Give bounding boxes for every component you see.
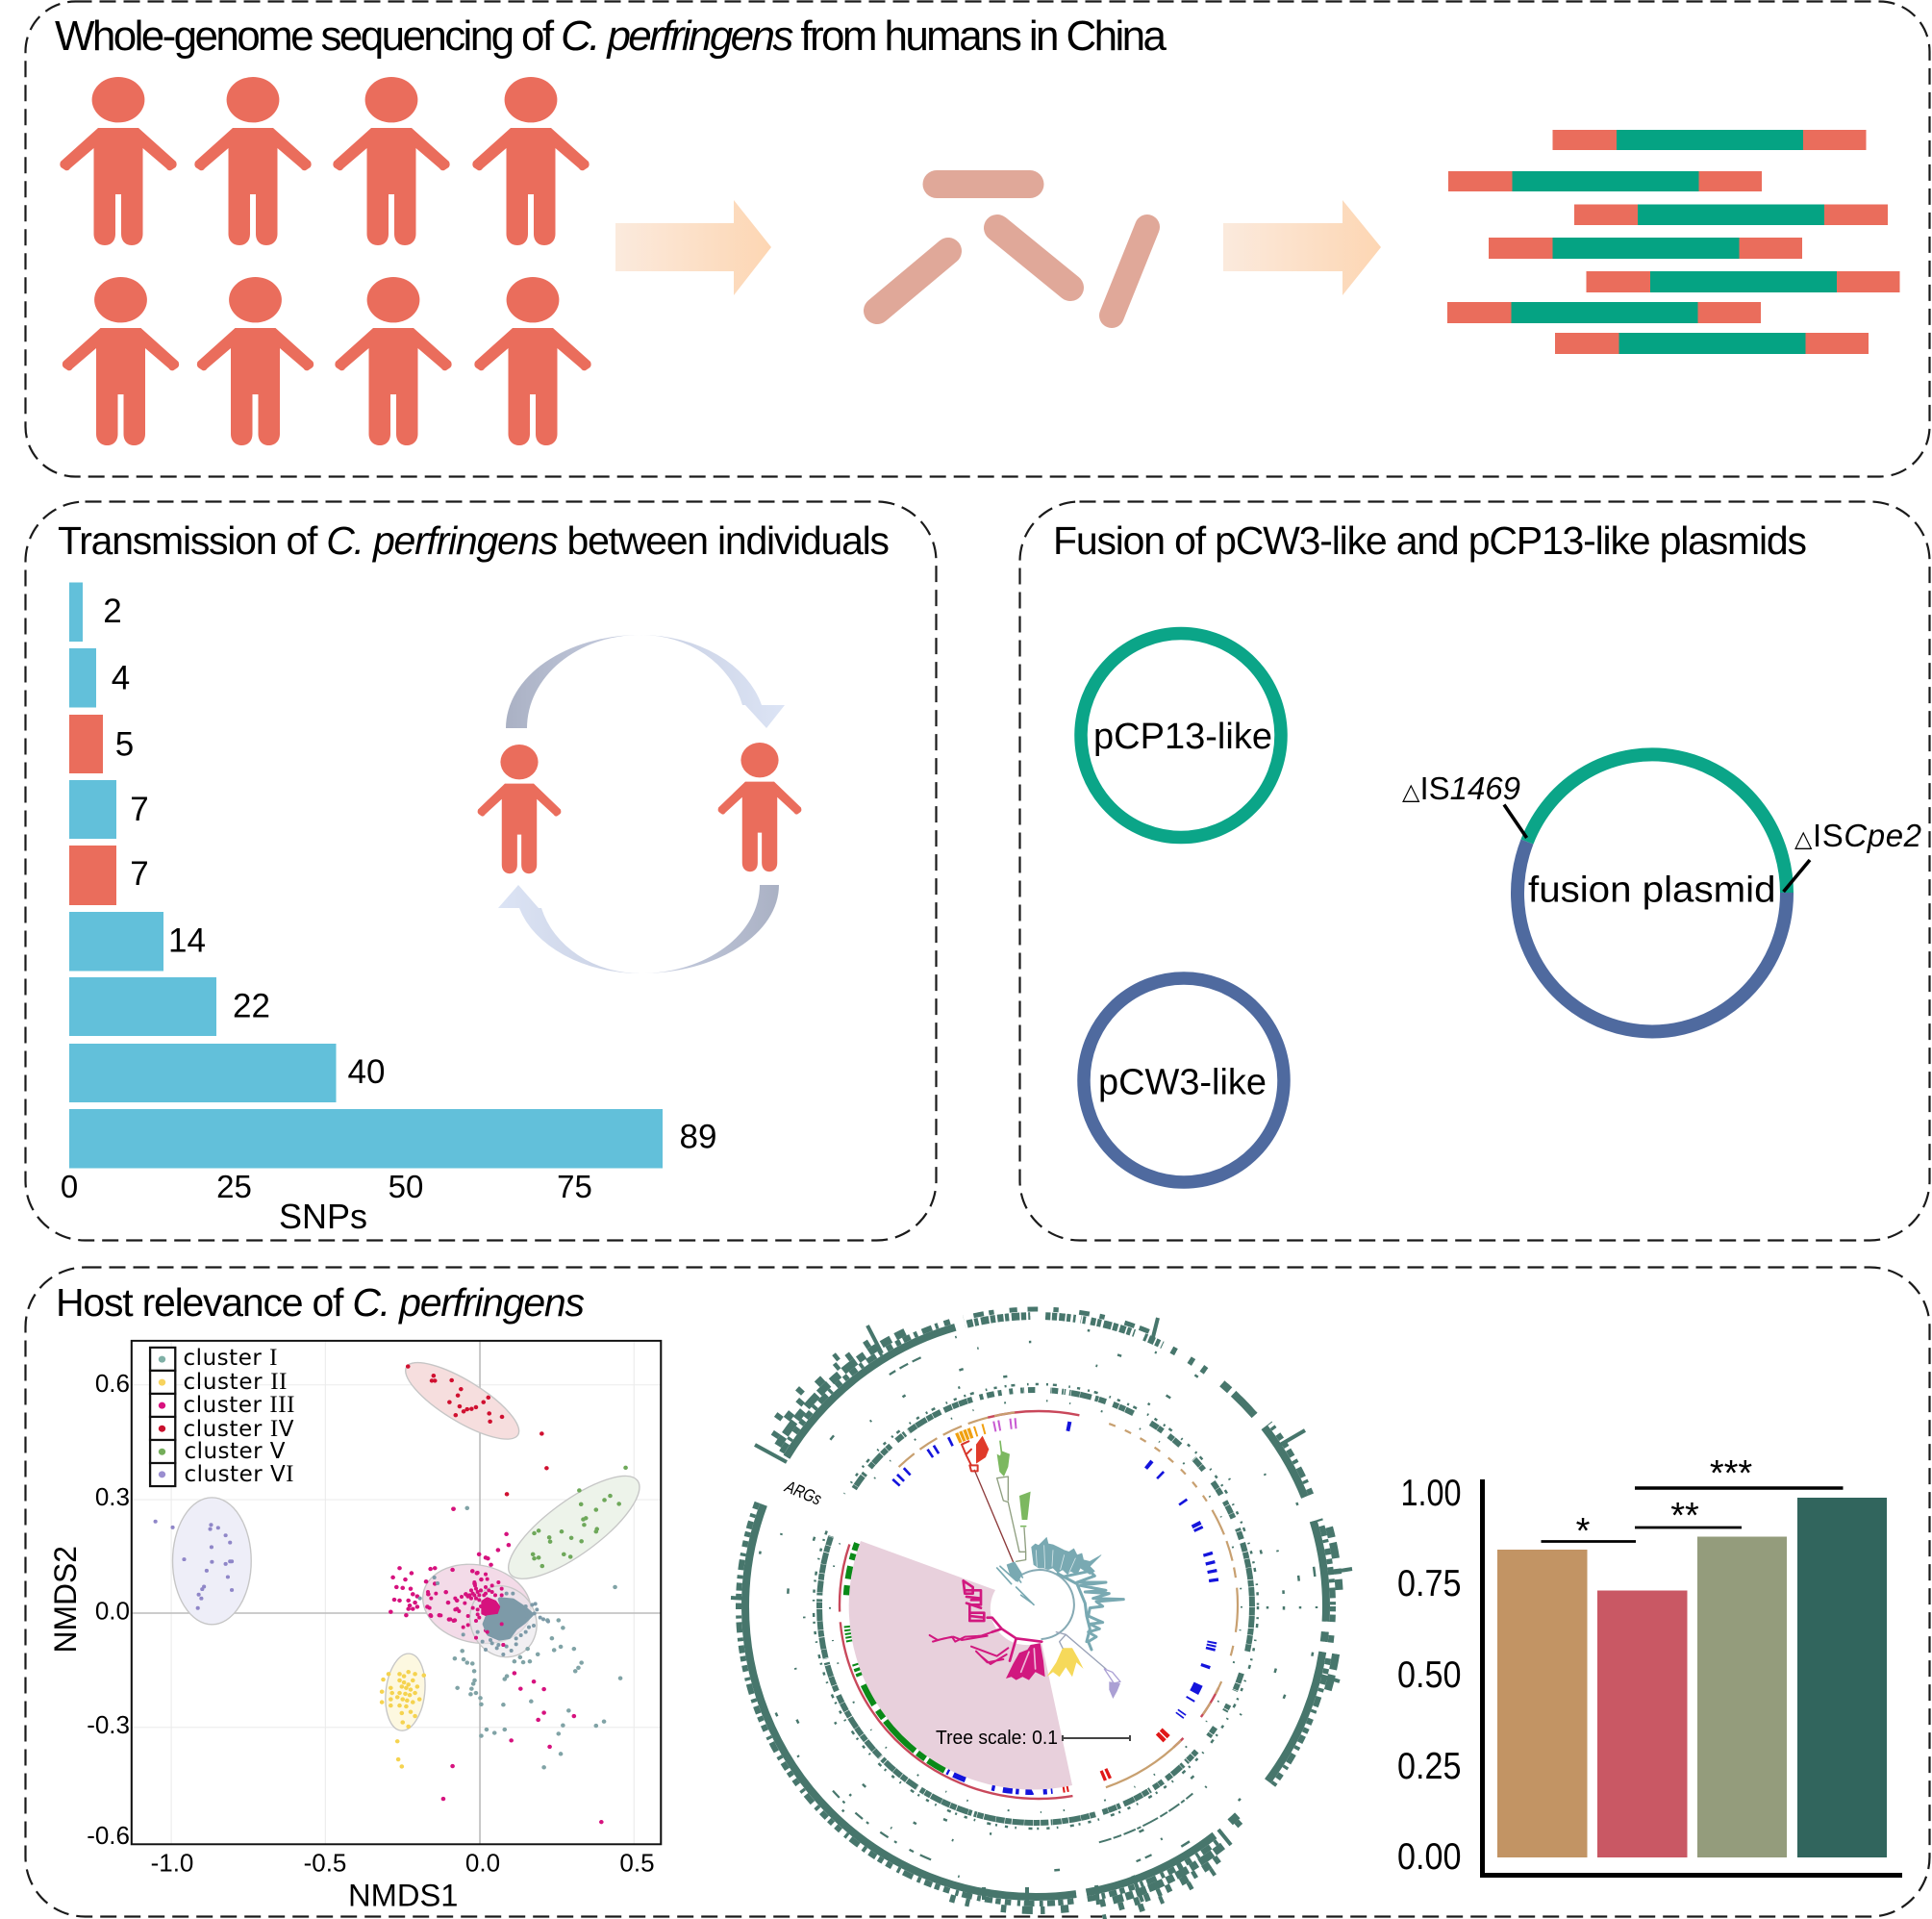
chart: NMDS scatter plot: cluster V bbox=[185, 1439, 286, 1464]
plasmid: pCP13-like bbox=[1081, 633, 1281, 837]
bar chart: SNPs: 22 bbox=[233, 987, 270, 1025]
chart: NMDS scatter plot bbox=[48, 1341, 661, 1912]
plasmid: pCP13-like: pCP13-like bbox=[1093, 717, 1272, 757]
heading: transmission: Transmission of C. perfringens between individuals bbox=[58, 518, 890, 563]
sequencing reads bbox=[1447, 130, 1900, 354]
plasmid: fusion plasmid: fusion plasmid bbox=[1528, 870, 1775, 910]
chart: NMDS scatter plot: 0.0 bbox=[95, 1597, 130, 1626]
chart: bar chart with significance brackets: ** bbox=[1670, 1496, 1699, 1536]
bar chart: SNPs: 25 bbox=[216, 1169, 252, 1204]
heading: host relevance: Host relevance of C. perfringens bbox=[56, 1280, 585, 1325]
long bar beside the gap bbox=[755, 1445, 787, 1462]
chart: NMDS scatter plot: 0.0 bbox=[465, 1849, 500, 1878]
chart: bar chart with significance brackets: * bbox=[1576, 1511, 1591, 1552]
plasmid: pCW3-like bbox=[1084, 978, 1284, 1182]
bar chart: SNPs bbox=[61, 583, 716, 1236]
panel: transmission between individuals bbox=[25, 502, 937, 1241]
icon: rod-shaped bacteria bbox=[877, 185, 1147, 316]
tree scale label: Tree scale: 0.1 bbox=[936, 1728, 1058, 1749]
resistance line ring bbox=[840, 1411, 1238, 1799]
chart: NMDS scatter plot: cluster VI bbox=[185, 1461, 294, 1487]
chart: NMDS scatter plot: NMDS2 bbox=[48, 1546, 83, 1653]
bar chart: SNPs: SNPs bbox=[279, 1197, 367, 1236]
plasmid: fusion plasmid bbox=[1402, 754, 1921, 1031]
chart: NMDS scatter plot: 0.6 bbox=[95, 1369, 130, 1398]
heading: plasmid fusion: Fusion of pCW3-like and pCP13-like plasmids bbox=[1053, 518, 1807, 563]
chart: NMDS scatter plot: cluster I bbox=[183, 1345, 277, 1371]
bar chart: SNPs: 5 bbox=[115, 725, 134, 764]
icon: transmission loop bbox=[478, 635, 801, 973]
chart: NMDS scatter plot: NMDS1 bbox=[348, 1878, 458, 1912]
arrow: bacteria to sequencing reads bbox=[1223, 200, 1381, 295]
chart: NMDS scatter plot: 0.3 bbox=[95, 1482, 130, 1511]
chart: bar chart with significance brackets: 0.25 bbox=[1397, 1746, 1462, 1787]
heading: whole-genome sequencing: Whole-genome sequencing of C. perfringens from humans in China bbox=[55, 13, 1167, 60]
chart: NMDS scatter plot: cluster II bbox=[183, 1369, 287, 1395]
chart: NMDS scatter plot: 0.5 bbox=[619, 1849, 655, 1878]
chart: NMDS scatter plot: -1.0 bbox=[151, 1849, 193, 1878]
bar chart: SNPs: 89 bbox=[680, 1118, 716, 1156]
plasmid: pCW3-like: pCW3-like bbox=[1098, 1062, 1267, 1102]
plasmid: fusion plasmid: △ISCpe2 bbox=[1794, 818, 1921, 853]
chart: NMDS scatter plot: -0.6 bbox=[87, 1821, 130, 1850]
chart: NMDS scatter plot: -0.5 bbox=[304, 1849, 346, 1878]
bar chart: SNPs: 50 bbox=[389, 1169, 423, 1204]
coloured tick ring bbox=[848, 1423, 1216, 1790]
chart: bar chart with significance brackets: *** bbox=[1710, 1453, 1752, 1494]
chart: circular phylogenetic tree with ARG rings bbox=[702, 1287, 1355, 1919]
outer bar ring bbox=[716, 1287, 1355, 1919]
ARGs label: ARGs bbox=[782, 1477, 824, 1509]
bar chart: SNPs: 2 bbox=[103, 593, 122, 630]
white gap in rings near ARGs label bbox=[702, 1426, 894, 1549]
panel: host relevance bbox=[25, 1268, 1929, 1919]
bar chart: SNPs: 7 bbox=[130, 791, 149, 828]
gaps between bar segments bbox=[726, 1297, 1345, 1916]
bar chart: SNPs: 0 bbox=[61, 1169, 78, 1204]
bar chart: SNPs: 4 bbox=[112, 660, 130, 696]
tree scale bar bbox=[1063, 1735, 1130, 1741]
panel: plasmid fusion bbox=[1019, 502, 1929, 1241]
icon group: eight human figures bbox=[60, 77, 591, 445]
phylogenetic tree bbox=[930, 1436, 1123, 1699]
chart: bar chart with significance brackets: 0.00 bbox=[1397, 1836, 1462, 1878]
chart: bar chart with significance brackets: 0.50 bbox=[1397, 1654, 1462, 1696]
bar chart: SNPs: 40 bbox=[348, 1053, 385, 1091]
chart: bar chart with significance brackets: 0.75 bbox=[1397, 1563, 1462, 1604]
bar chart: SNPs: 7 bbox=[130, 855, 149, 893]
chart: bar chart with significance brackets: 1.00 bbox=[1400, 1473, 1462, 1514]
sparse and inner rings bbox=[755, 1326, 1317, 1887]
bar chart: SNPs: 14 bbox=[168, 922, 206, 960]
bar chart: SNPs: 75 bbox=[557, 1169, 592, 1204]
chart: NMDS scatter plot: cluster III bbox=[183, 1392, 294, 1418]
panel: whole-genome sequencing bbox=[25, 2, 1929, 477]
plasmid: fusion plasmid: △IS1469 bbox=[1402, 770, 1520, 806]
long bars on outer ring bbox=[731, 1318, 1352, 1905]
chart: NMDS scatter plot: -0.3 bbox=[87, 1710, 130, 1739]
arrow: humans to bacteria bbox=[615, 200, 771, 295]
chart: NMDS scatter plot: cluster IV bbox=[183, 1416, 294, 1442]
dense core of clusters I and III bbox=[420, 1573, 548, 1654]
pink sector bbox=[849, 1541, 1072, 1790]
low-bar stretch along the top bbox=[736, 1306, 1336, 1906]
chart: bar chart with significance brackets bbox=[1397, 1453, 1902, 1878]
